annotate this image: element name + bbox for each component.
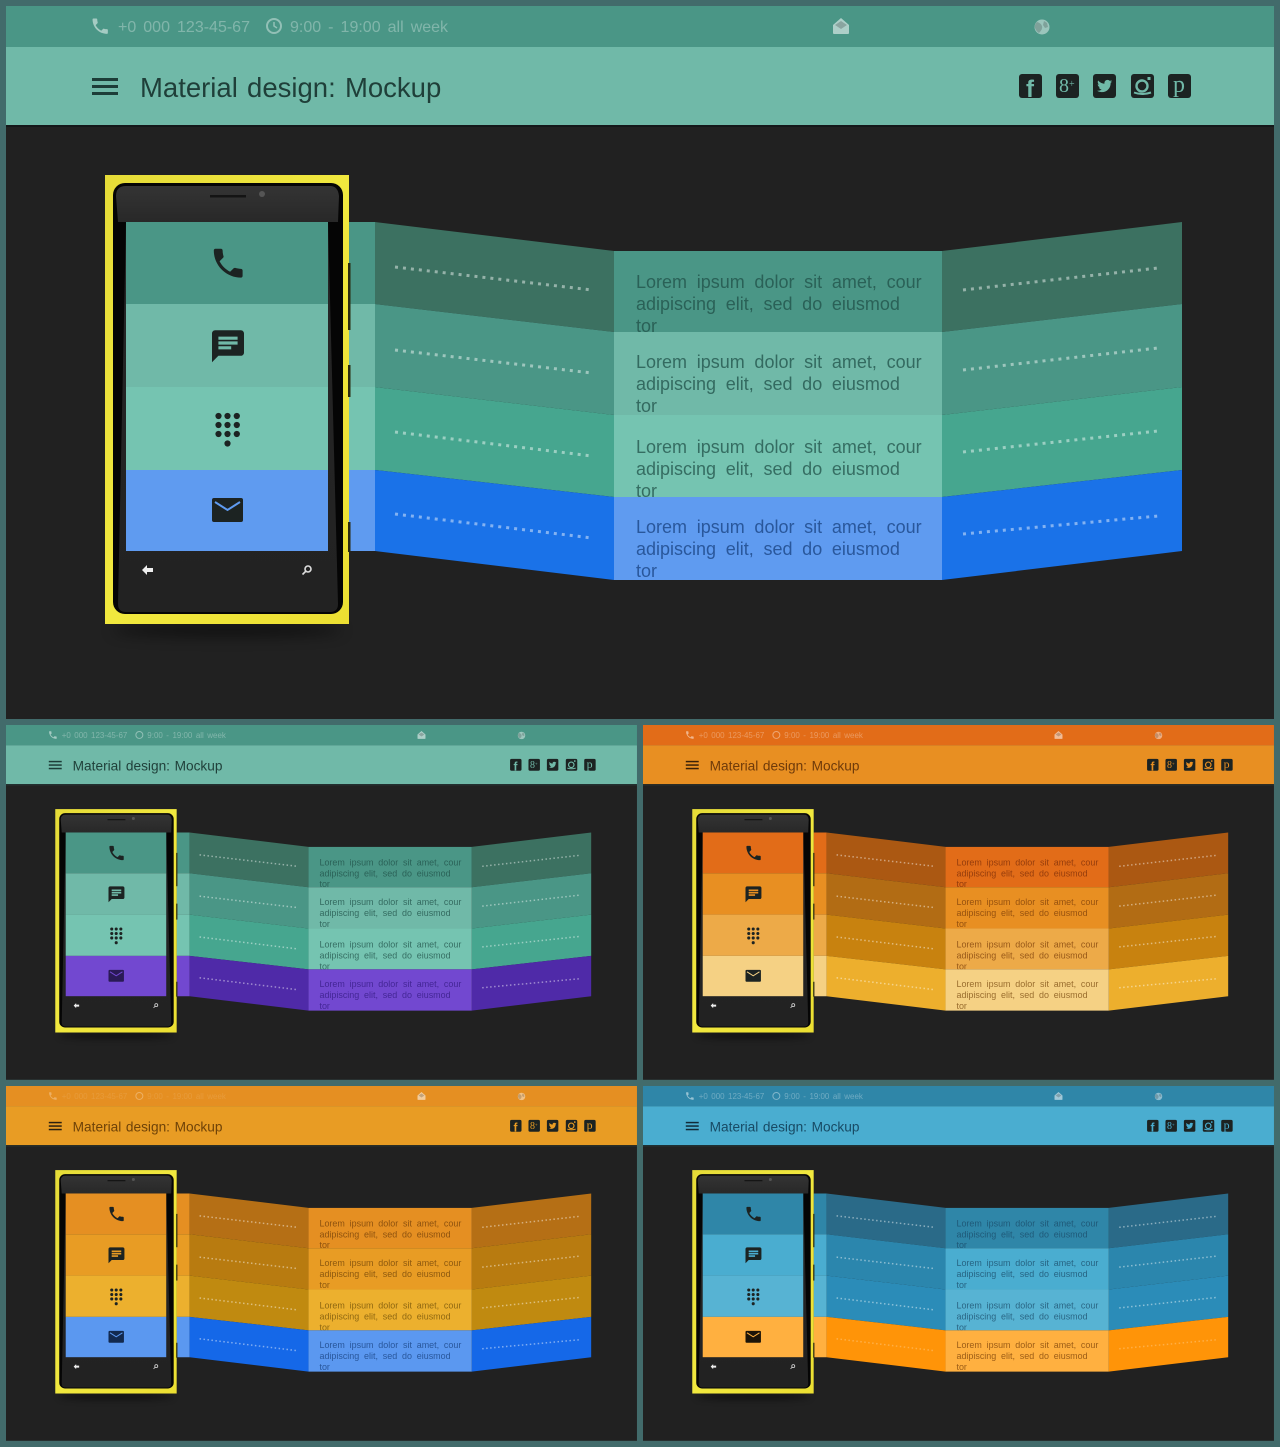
fold band 2	[349, 304, 1182, 416]
top info bar: 9:00 - 19:00 all week	[784, 731, 863, 740]
dark stage	[6, 785, 637, 1080]
fold band 4: Lorem ipsum dolor sit amet, cour	[956, 1340, 1098, 1350]
fold band 3	[814, 1276, 1228, 1332]
fold band 3: adipiscing elit, sed do eiusmod	[636, 459, 900, 479]
navigation bar: Material design: Mockup	[710, 758, 860, 773]
navigation bar: Material design: Mockup	[73, 758, 223, 773]
social icons: f	[1151, 1120, 1155, 1134]
fold band 4: adipiscing elit, sed do eiusmod	[319, 990, 451, 1000]
fold band 2: adipiscing elit, sed do eiusmod	[636, 374, 900, 394]
fold band 3: Lorem ipsum dolor sit amet, cour	[319, 1300, 461, 1310]
navigation bar: Material design: Mockup	[140, 72, 441, 103]
fold band 4	[814, 956, 1228, 1011]
fold band 2: tor	[956, 919, 967, 929]
fold band 4: adipiscing elit, sed do eiusmod	[319, 1351, 451, 1361]
panel: main teal and blue mockup	[6, 6, 1274, 719]
social icons: +	[1069, 79, 1075, 90]
dark stage	[6, 1146, 637, 1441]
panel: amber and blue variant	[6, 1086, 637, 1441]
phone mockup	[692, 809, 814, 1038]
fold band 4: adipiscing elit, sed do eiusmod	[636, 539, 900, 559]
fold band 4: Lorem ipsum dolor sit amet, cour	[319, 1340, 461, 1350]
social icons	[1147, 757, 1233, 773]
dark stage	[643, 785, 1274, 1080]
top info bar	[643, 725, 1274, 745]
fold band 3: tor	[636, 481, 657, 501]
top info bar: 9:00 - 19:00 all week	[784, 1092, 863, 1101]
social icons: f	[514, 1120, 518, 1134]
social icons: p	[1224, 1118, 1230, 1132]
fold band 3: tor	[319, 961, 330, 971]
fold band 2	[177, 873, 591, 929]
social icons: p	[587, 1118, 593, 1132]
fold band 2: tor	[319, 919, 330, 929]
fold band 2: tor	[956, 1280, 967, 1290]
fold band 4: tor	[636, 561, 657, 581]
fold band 1: adipiscing elit, sed do eiusmod	[636, 294, 900, 314]
fold band 4	[177, 956, 591, 1011]
social icons: 8	[530, 760, 535, 771]
top info bar	[643, 1086, 1274, 1106]
fold band 2: Lorem ipsum dolor sit amet, cour	[956, 897, 1098, 907]
fold band 4: Lorem ipsum dolor sit amet, cour	[319, 979, 461, 989]
fold band 1: tor	[319, 1240, 330, 1250]
phone mockup	[105, 175, 350, 636]
top info bar	[6, 6, 1274, 47]
top info bar: 9:00 - 19:00 all week	[147, 1092, 226, 1101]
top info bar: +0 000 123-45-67	[699, 1092, 765, 1101]
fold band 4	[177, 1317, 591, 1372]
social icons	[510, 1118, 596, 1134]
social icons: 8	[1167, 1121, 1172, 1132]
fold band 3: Lorem ipsum dolor sit amet, cour	[319, 939, 461, 949]
fold band 4: Lorem ipsum dolor sit amet, cour	[636, 517, 922, 537]
fold band 3: Lorem ipsum dolor sit amet, cour	[956, 1300, 1098, 1310]
fold band 1: Lorem ipsum dolor sit amet, cour	[319, 1218, 461, 1228]
social icons: +	[1172, 1123, 1175, 1128]
fold band 3	[349, 387, 1182, 501]
top info bar: +0 000 123-45-67	[62, 1092, 128, 1101]
social icons: p	[587, 757, 593, 771]
fold band 1: tor	[319, 879, 330, 889]
social icons	[1147, 1118, 1233, 1134]
fold band 1: adipiscing elit, sed do eiusmod	[319, 868, 451, 878]
fold band 2	[814, 873, 1228, 929]
fold band 3: adipiscing elit, sed do eiusmod	[319, 1311, 451, 1321]
panel: blue and orange variant	[643, 1086, 1274, 1441]
fold band 3: tor	[319, 1322, 330, 1332]
fold band 2: tor	[636, 396, 657, 416]
fold band 3: adipiscing elit, sed do eiusmod	[319, 950, 451, 960]
fold band 2: tor	[319, 1280, 330, 1290]
social icons: 8	[530, 1121, 535, 1132]
social icons: 8	[1059, 75, 1069, 97]
fold band 1	[349, 222, 1182, 336]
fold band 1: Lorem ipsum dolor sit amet, cour	[636, 272, 922, 292]
fold band 4	[814, 1317, 1228, 1372]
fold band 4: tor	[956, 1001, 967, 1011]
fold band 3: Lorem ipsum dolor sit amet, cour	[636, 437, 922, 457]
fold band 4: adipiscing elit, sed do eiusmod	[956, 990, 1088, 1000]
social icons: f	[514, 759, 518, 773]
social icons: p	[1173, 72, 1185, 98]
fold band 1: Lorem ipsum dolor sit amet, cour	[956, 1218, 1098, 1228]
navigation bar	[6, 47, 1274, 127]
fold band 2: Lorem ipsum dolor sit amet, cour	[319, 1258, 461, 1268]
top info bar: 9:00 - 19:00 all week	[147, 731, 226, 740]
fold band 3	[177, 915, 591, 971]
social icons	[510, 757, 596, 773]
top info bar	[6, 725, 637, 745]
social icons: +	[1172, 762, 1175, 767]
fold band 1	[177, 1193, 591, 1250]
fold band 3: Lorem ipsum dolor sit amet, cour	[956, 939, 1098, 949]
social icons: p	[1224, 757, 1230, 771]
fold band 1	[177, 832, 591, 889]
phone mockup	[55, 809, 177, 1038]
top info bar	[6, 1086, 637, 1106]
fold band 4: adipiscing elit, sed do eiusmod	[956, 1351, 1088, 1361]
fold band 4: tor	[319, 1001, 330, 1011]
fold band 2: Lorem ipsum dolor sit amet, cour	[636, 352, 922, 372]
fold band 2: Lorem ipsum dolor sit amet, cour	[319, 897, 461, 907]
phone mockup	[55, 1170, 177, 1399]
fold band 4: Lorem ipsum dolor sit amet, cour	[956, 979, 1098, 989]
social icons: f	[1026, 76, 1035, 103]
top info bar: +0 000 123-45-67	[118, 19, 250, 36]
navigation bar: Material design: Mockup	[710, 1119, 860, 1134]
navigation bar	[643, 1106, 1274, 1146]
social icons: f	[1151, 759, 1155, 773]
fold band 1: adipiscing elit, sed do eiusmod	[319, 1229, 451, 1239]
dark stage	[6, 127, 1274, 719]
fold band 2: adipiscing elit, sed do eiusmod	[956, 908, 1088, 918]
top info bar: +0 000 123-45-67	[62, 731, 128, 740]
social icons: +	[535, 1123, 538, 1128]
dark stage	[643, 1146, 1274, 1441]
top info bar: +0 000 123-45-67	[699, 731, 765, 740]
fold band 3: tor	[956, 1322, 967, 1332]
fold band 3	[177, 1276, 591, 1332]
fold band 2	[814, 1234, 1228, 1290]
navigation bar	[6, 1106, 637, 1146]
navigation bar	[6, 745, 637, 785]
fold band 1: tor	[956, 1240, 967, 1250]
social icons: 8	[1167, 760, 1172, 771]
fold band 2: adipiscing elit, sed do eiusmod	[319, 908, 451, 918]
fold band 1	[814, 1193, 1228, 1250]
fold band 2	[177, 1234, 591, 1290]
fold band 4: tor	[319, 1362, 330, 1372]
fold band 1	[814, 832, 1228, 889]
fold band 3: adipiscing elit, sed do eiusmod	[956, 950, 1088, 960]
fold band 3	[814, 915, 1228, 971]
fold band 4	[349, 470, 1182, 581]
social icons: +	[535, 762, 538, 767]
fold band 3: tor	[956, 961, 967, 971]
fold band 3: adipiscing elit, sed do eiusmod	[956, 1311, 1088, 1321]
fold band 1: tor	[636, 316, 657, 336]
fold band 1: adipiscing elit, sed do eiusmod	[956, 868, 1088, 878]
fold band 4: tor	[956, 1362, 967, 1372]
top info bar: 9:00 - 19:00 all week	[290, 19, 449, 36]
navigation bar: Material design: Mockup	[73, 1119, 223, 1134]
social icons	[1019, 72, 1191, 103]
panel: orange variant	[643, 725, 1274, 1080]
fold band 2: adipiscing elit, sed do eiusmod	[956, 1269, 1088, 1279]
fold band 2: adipiscing elit, sed do eiusmod	[319, 1269, 451, 1279]
fold band 1: Lorem ipsum dolor sit amet, cour	[319, 857, 461, 867]
fold band 1: Lorem ipsum dolor sit amet, cour	[956, 857, 1098, 867]
panel: teal and purple variant	[6, 725, 637, 1080]
fold band 1: tor	[956, 879, 967, 889]
phone mockup	[692, 1170, 814, 1399]
navigation bar	[643, 745, 1274, 785]
fold band 1: adipiscing elit, sed do eiusmod	[956, 1229, 1088, 1239]
fold band 2: Lorem ipsum dolor sit amet, cour	[956, 1258, 1098, 1268]
